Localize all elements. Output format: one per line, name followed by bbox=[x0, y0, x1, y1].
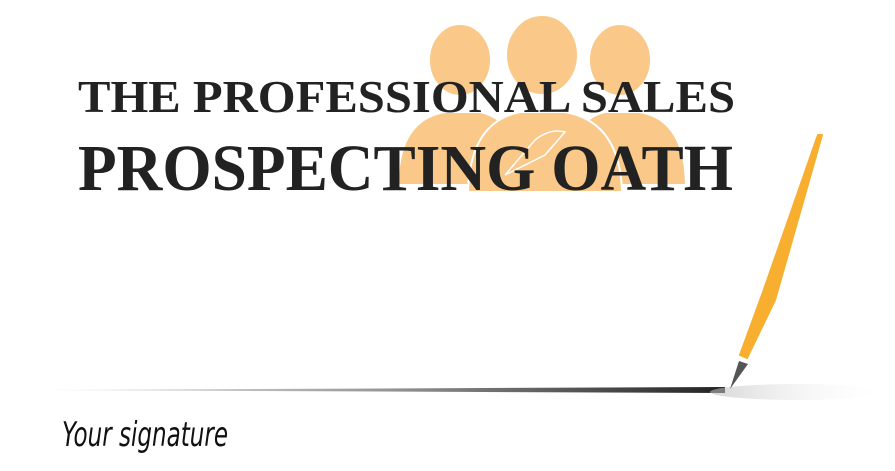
title: PROSPECTING OATH bbox=[78, 132, 733, 205]
signature line bbox=[20, 384, 890, 400]
title: THE PROFESSIONAL SALES bbox=[78, 71, 735, 122]
right person bbox=[565, 24, 686, 185]
icon: pen bbox=[730, 135, 822, 389]
left person bbox=[398, 24, 522, 185]
center person bbox=[468, 15, 622, 192]
title bbox=[78, 71, 735, 205]
signature label: Your signature bbox=[62, 415, 228, 455]
hand bbox=[505, 131, 565, 175]
icon: people group bbox=[398, 15, 686, 192]
